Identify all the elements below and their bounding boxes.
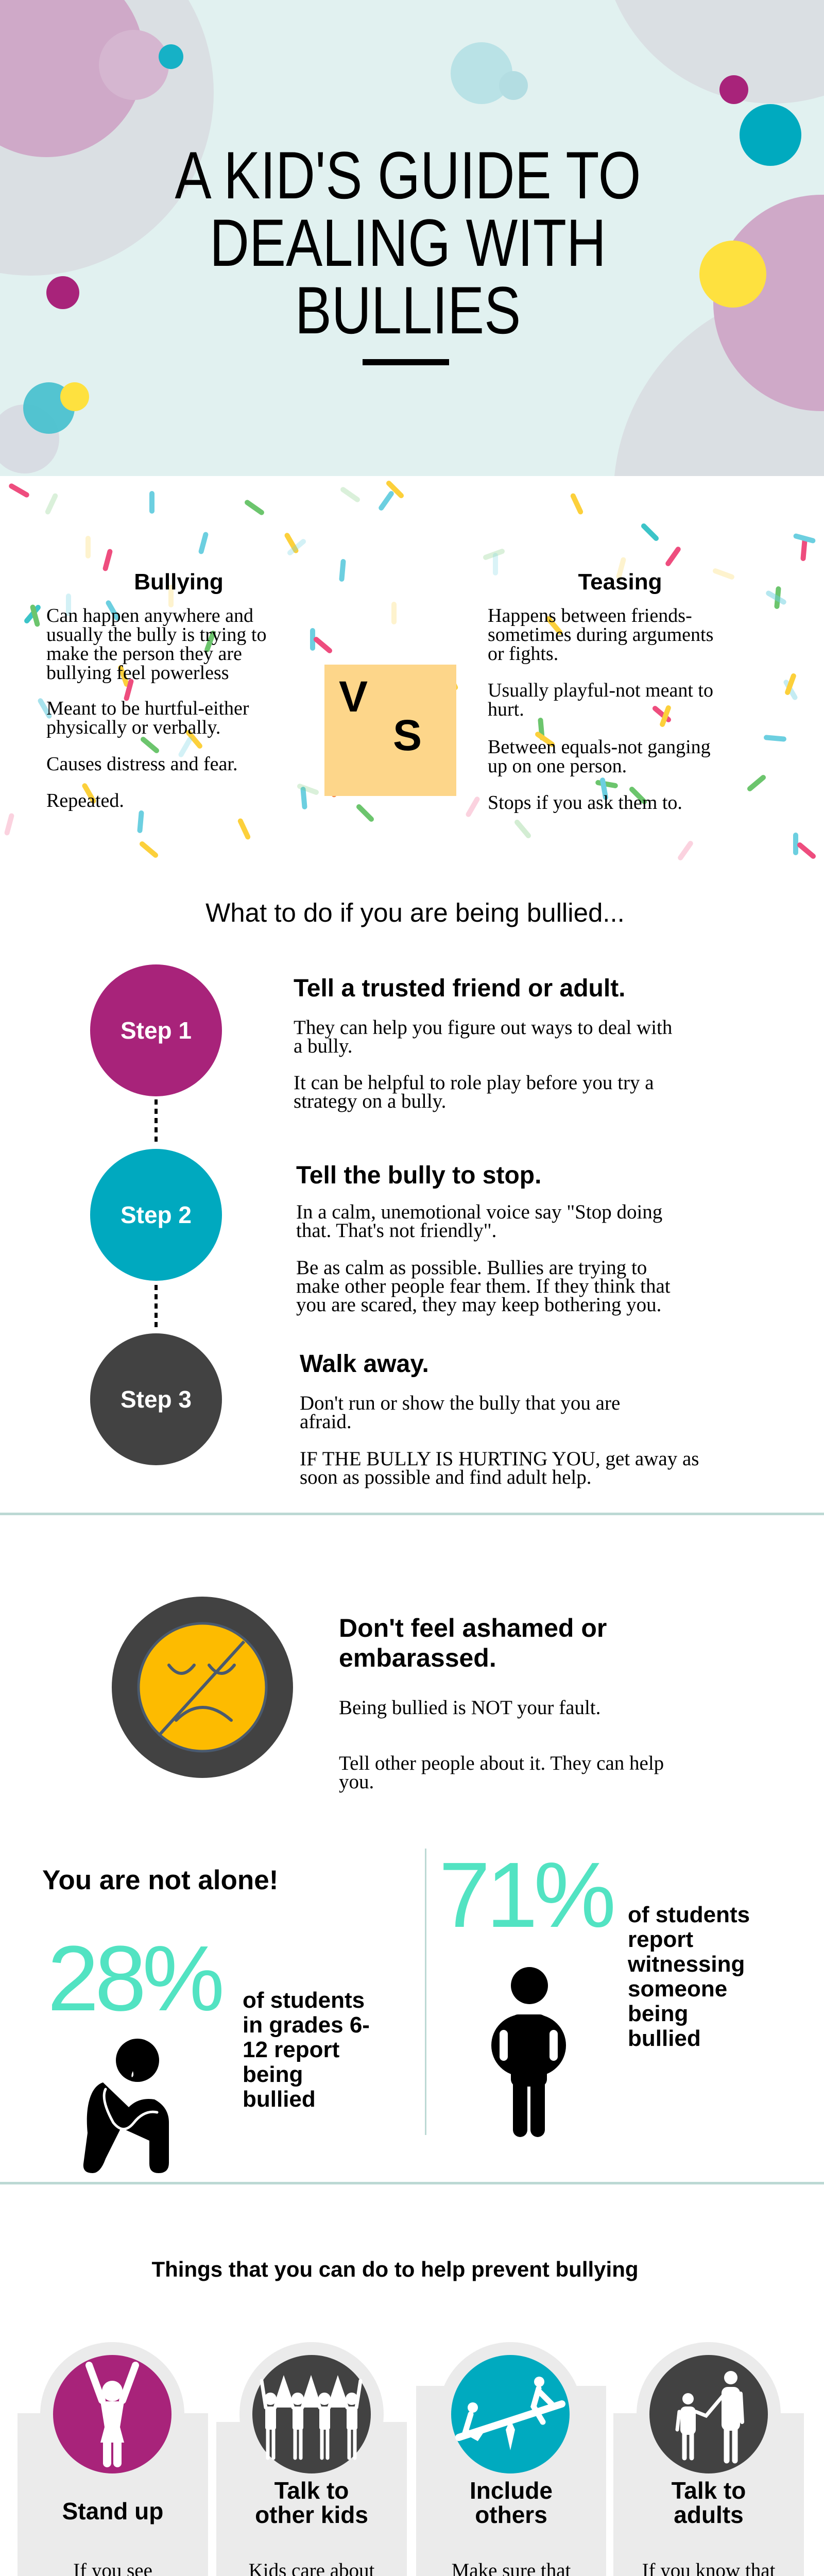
title: stand up: Stand up	[62, 2498, 163, 2524]
title: include others: Include	[470, 2477, 553, 2504]
step 1 text: strategy on a bully.	[294, 1090, 446, 1112]
text: teasing points: Between equals-not ganging	[488, 736, 711, 758]
text: teasing points	[488, 605, 713, 814]
step 2 text: that. That's not friendly".	[296, 1219, 496, 1242]
step 3 text: Don't run or show the bully that you are	[300, 1392, 620, 1414]
step 2 text: you are scared, they may keep bothering you.	[296, 1294, 661, 1316]
icon: arms raised	[53, 2355, 171, 2473]
step 2 text: Be as calm as possible. Bullies are trying to	[296, 1257, 647, 1279]
icon: seesaw	[451, 2355, 570, 2473]
heading: you are not alone: You are not alone!	[42, 1865, 278, 1895]
text: bullying points: bullying feel powerless	[46, 662, 229, 684]
step 3 circle	[90, 1333, 222, 1465]
step 2 title: Tell the bully to stop.	[296, 1162, 541, 1189]
step 1 title: Tell a trusted friend or adult.	[294, 975, 626, 1002]
text: bullying points: make the person they are	[46, 643, 242, 665]
text: bullying points: usually the bully is trying to	[46, 624, 266, 646]
stat text 71%: witnessing	[628, 1952, 745, 1977]
step 3 text: soon as possible and find adult help.	[300, 1466, 592, 1488]
stat text 28%: in grades 6-	[243, 2012, 370, 2038]
title: talk to other kids: Talk to	[274, 2477, 349, 2504]
text: teasing points: hurt.	[488, 699, 524, 720]
stat text 71%: of students	[628, 1902, 750, 1927]
title: BULLIES	[295, 273, 521, 348]
heading: don't feel ashamed: Don't feel ashamed or	[339, 1614, 607, 1642]
stat text 28%: being	[243, 2062, 303, 2087]
divider vertical	[425, 1849, 426, 2135]
confetti background	[4, 481, 816, 860]
step 2 circle	[90, 1149, 222, 1281]
step 1 text: a bully.	[294, 1035, 352, 1057]
text: teasing points: sometimes during arguments	[488, 624, 713, 646]
step 1 circle	[90, 964, 222, 1096]
vs box: V	[339, 672, 368, 721]
text: not your fault: Being bullied is NOT your fault.	[339, 1697, 600, 1719]
title: A KID'S GUIDE TO	[175, 138, 641, 213]
stat text 28%: of students	[243, 1988, 365, 2013]
heading: Teasing: Teasing	[578, 569, 662, 595]
title: talk to adults	[672, 2477, 746, 2528]
text: teasing points: Happens between friends-	[488, 605, 692, 626]
step 2 text: make other people fear them. If they think that	[296, 1275, 671, 1297]
text: bullying points: Causes distress and fear.	[46, 753, 237, 775]
heading: Bullying: Bullying	[134, 569, 224, 595]
stat text 71%: someone	[628, 1976, 727, 2002]
text: tell others	[339, 1752, 664, 1793]
icon: standing child	[491, 1967, 566, 2137]
heading: what to do: What to do if you are being bullied...	[205, 898, 625, 927]
heading: don't feel ashamed: embarassed.	[339, 1643, 496, 1672]
icon: kneeling child	[83, 2039, 169, 2173]
title: include others: others	[475, 2501, 547, 2528]
icon: no shame face	[112, 1597, 293, 1778]
vs box	[324, 665, 456, 796]
text: bullying points: physically or verbally.	[46, 717, 220, 738]
title underline	[363, 359, 449, 365]
step 3 text: afraid.	[300, 1411, 352, 1433]
heading: don't feel ashamed	[339, 1614, 607, 1672]
title: talk to other kids	[255, 2477, 368, 2528]
stat text 28%: 12 report	[243, 2037, 339, 2062]
step 3 text	[300, 1392, 699, 1488]
stat text 71%: bullied	[628, 2026, 701, 2051]
title: DEALING WITH	[210, 205, 606, 280]
text: bullying points: Meant to be hurtful-either	[46, 698, 249, 719]
stat text 28%: bullied	[243, 2087, 316, 2112]
stat text 71%	[627, 1902, 750, 2051]
text: bullying points: Repeated.	[46, 790, 124, 811]
step 1 text: They can help you figure out ways to deal with	[294, 1016, 672, 1039]
stat text 28%	[243, 1988, 370, 2112]
step 2 text: In a calm, unemotional voice say "Stop doing	[296, 1201, 662, 1223]
dotted connectors	[154, 1099, 158, 1327]
step 1 text: It can be helpful to role play before you try a	[294, 1072, 654, 1094]
stat: 28%: 28%	[47, 1927, 220, 2030]
icon: kids holding hands	[252, 2355, 371, 2473]
panel: steps	[90, 964, 699, 1488]
text: bullying points: Can happen anywhere and	[46, 605, 253, 626]
stat text 71%: being	[628, 2001, 688, 2026]
panel: bullying vs teasing	[46, 569, 713, 814]
heading: prevent bullying: Things that you can do to help prevent bullying	[151, 2257, 639, 2281]
text: teasing points: Usually playful-not meant to	[488, 680, 713, 701]
text: teasing points: or fights.	[488, 643, 558, 665]
icon: adult and child	[649, 2355, 768, 2473]
stat: 71%: 71%	[439, 1843, 612, 1947]
panel: card stand up	[18, 2342, 208, 2576]
panel: card talk to adults	[613, 2342, 804, 2576]
vs box: S	[393, 711, 422, 759]
text: tell others: Tell other people about it. They can help	[339, 1752, 664, 1774]
text: teasing points: Stops if you ask them to.	[488, 792, 682, 814]
step 3 title: Walk away.	[300, 1350, 429, 1378]
title: include others	[470, 2477, 553, 2528]
step 1 text	[294, 1016, 672, 1112]
header background with circles	[0, 0, 824, 476]
title: talk to adults: adults	[674, 2501, 744, 2528]
step 2 circle: Step 2	[121, 1201, 192, 1228]
stat text 71%: report	[628, 1927, 693, 1952]
step 2 text	[296, 1201, 671, 1316]
title: talk to adults: Talk to	[672, 2477, 746, 2504]
panel: card talk to other kids	[216, 2342, 407, 2576]
title	[175, 138, 641, 348]
text: teasing points: up on one person.	[488, 755, 627, 777]
text: tell others: you.	[339, 1771, 374, 1793]
panel: card include others	[416, 2342, 606, 2576]
step 3 circle: Step 3	[121, 1386, 192, 1413]
title: talk to other kids: other kids	[255, 2501, 368, 2528]
step 1 circle: Step 1	[121, 1017, 192, 1044]
text: bullying points	[46, 605, 266, 811]
step 3 text: IF THE BULLY IS HURTING YOU, get away as	[300, 1448, 699, 1470]
